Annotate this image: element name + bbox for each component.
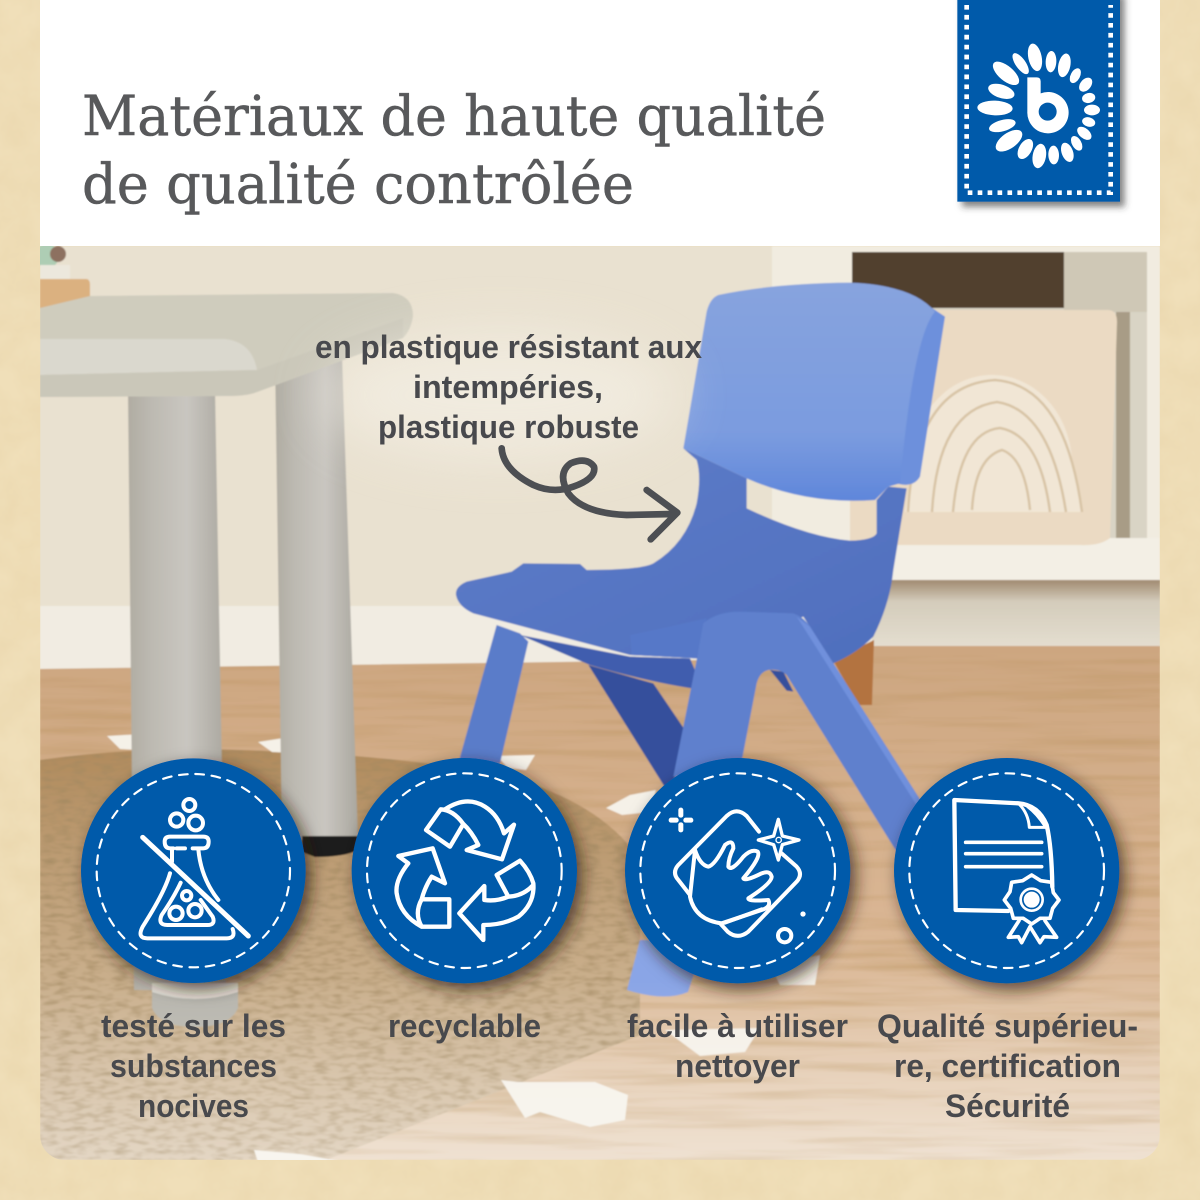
title xyxy=(82,84,826,216)
callout glow xyxy=(325,333,675,457)
label: tested: nocives xyxy=(138,1088,249,1124)
light fade xyxy=(40,1014,1160,1160)
table xyxy=(35,244,413,1027)
backrest side panel xyxy=(898,307,946,486)
label: easy to clean xyxy=(627,1008,848,1084)
label: recyclable: recyclable xyxy=(388,1008,541,1044)
shelf unit xyxy=(772,246,1160,656)
lower leg tip xyxy=(627,940,705,997)
toy on table xyxy=(40,246,91,308)
title: Matériaux de haute qualité xyxy=(82,84,826,148)
title: de qualité contrôlée xyxy=(82,152,634,216)
photo: table and blue chair in a playroom xyxy=(35,244,1160,1165)
logo tag xyxy=(957,0,1120,202)
label: tested: substances xyxy=(110,1048,277,1084)
wooden foot xyxy=(833,640,874,705)
badge: easy to clean cloth xyxy=(625,758,850,983)
seat and back support xyxy=(456,448,907,663)
wooden foot front xyxy=(833,640,874,705)
label: quality: re, certification xyxy=(894,1048,1121,1084)
front leg xyxy=(673,612,920,851)
storage basket with rainbow xyxy=(850,310,1117,545)
badge: recycling arrows xyxy=(352,758,577,983)
callout text: plastique robuste xyxy=(378,409,639,445)
blue chair xyxy=(456,283,953,852)
label: easy to clean: facile à utiliser xyxy=(627,1008,848,1044)
rear legs xyxy=(458,625,528,763)
tassels xyxy=(107,734,820,1162)
callout text: en plastique résistant aux xyxy=(315,329,702,365)
rug xyxy=(40,745,650,1165)
callout text xyxy=(315,329,702,445)
label: tested xyxy=(101,1008,286,1124)
white header band xyxy=(40,0,1160,246)
badge: safety certificate xyxy=(894,758,1119,983)
label: easy to clean: nettoyer xyxy=(675,1048,800,1084)
backrest xyxy=(683,283,935,501)
curly arrow xyxy=(502,448,677,539)
label: tested: testé sur les xyxy=(101,1008,286,1044)
label: quality: Qualité supérieu- xyxy=(877,1008,1138,1044)
label: quality: Sécurité xyxy=(945,1088,1070,1124)
baseboard xyxy=(40,606,608,650)
floor xyxy=(40,650,1160,1160)
label: quality xyxy=(877,1008,1138,1124)
callout text: intempéries, xyxy=(413,369,603,405)
under seat xyxy=(520,635,703,690)
badge: tested chemical flask xyxy=(81,758,306,983)
